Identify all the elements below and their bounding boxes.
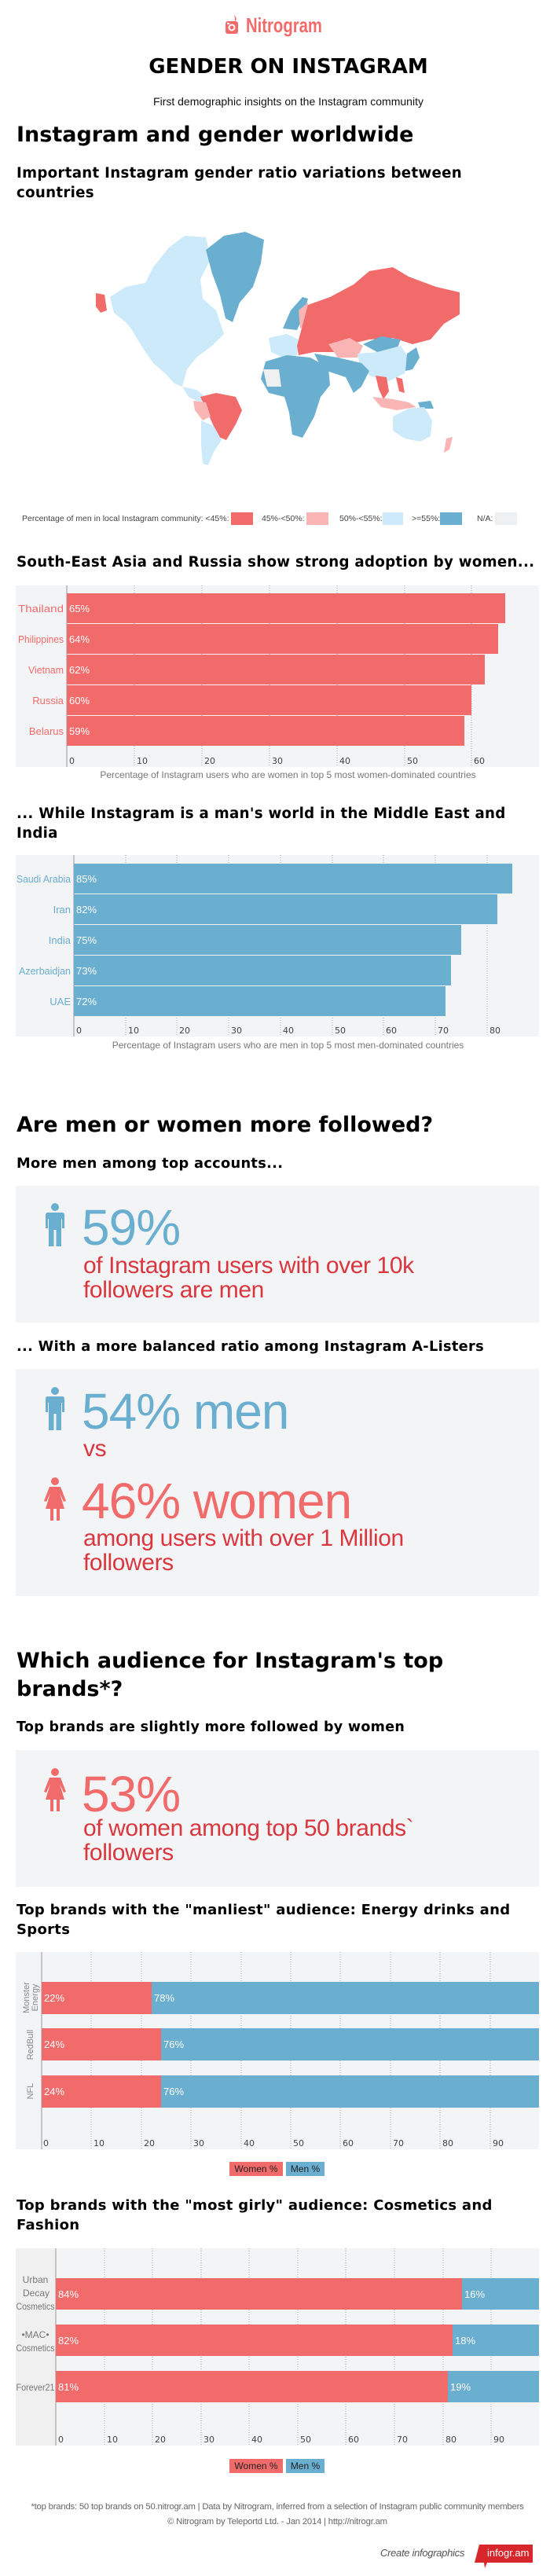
stacked bar chart: manliest brands: 20 bbox=[144, 2138, 155, 2149]
bar chart: women-dominated countries: Thailand bbox=[18, 603, 64, 615]
stacked bar chart: manliest brands: 40 bbox=[244, 2138, 255, 2149]
Africa bbox=[261, 355, 330, 438]
icon: woman bbox=[44, 1768, 66, 1811]
stacked bar chart: girly brands: 0 bbox=[58, 2435, 64, 2445]
text: description bbox=[83, 1525, 404, 1576]
Asia bbox=[314, 336, 434, 410]
legend: girly chart: Women % bbox=[234, 2460, 278, 2471]
stacked bar chart: manliest brands: NFL bbox=[26, 2083, 35, 2099]
map legend: N/A: bbox=[477, 514, 493, 523]
bar chart: men-dominated countries: India bbox=[49, 934, 72, 946]
stacked bar chart: girly brands: 81% bbox=[58, 2381, 79, 2393]
bar chart: men-dominated countries: 0 bbox=[76, 1026, 82, 1036]
stacked bar chart: girly brands: Decay bbox=[23, 2288, 50, 2299]
Europe and Russia bbox=[269, 267, 460, 358]
stat: 53%: 53% bbox=[82, 1766, 180, 1822]
stacked bar chart: manliest brands: 78% bbox=[154, 1992, 174, 2004]
bar chart: women-dominated countries: 40 bbox=[339, 756, 350, 766]
stacked bar chart: girly brands: 60 bbox=[348, 2435, 359, 2445]
caption: men chart: Percentage of Instagram users who are men in top 5 most men-dominated countries bbox=[112, 1040, 464, 1051]
legend: manliest chart: Men % bbox=[291, 2163, 320, 2174]
bar chart: men-dominated countries: 40 bbox=[283, 1026, 294, 1036]
text: description: of women among top 50 brands` bbox=[83, 1815, 413, 1841]
stacked bar chart: manliest brands: 90 bbox=[493, 2138, 504, 2149]
heading: Are men or women more followed?: Are men or women more followed? bbox=[16, 1113, 433, 1137]
text: description: followers bbox=[83, 1840, 174, 1866]
subheading: Top brands slightly more followed by women: Top brands are slightly more followed by women bbox=[16, 1719, 405, 1735]
subheading: most girly audience: Top brands with the "most girly" audience: Cosmetics and Fashion bbox=[16, 2197, 493, 2233]
stacked bar chart: manliest brands: 24% bbox=[44, 2086, 64, 2097]
map legend: Percentage of men in local Instagram community: <45%: bbox=[22, 514, 229, 523]
icon: man bbox=[46, 1387, 64, 1430]
bar chart: men-dominated countries: 80 bbox=[490, 1026, 500, 1036]
icon: camera logo bbox=[226, 15, 238, 34]
stacked bar chart: girly brands: Cosmetics bbox=[16, 2301, 55, 2312]
stacked bar chart: manliest brands: 30 bbox=[193, 2138, 204, 2149]
panel: 53% women bbox=[16, 1750, 539, 1887]
stat: 46% women: 46% women bbox=[82, 1473, 351, 1529]
bar chart: women-dominated countries bbox=[16, 585, 539, 767]
title: GENDER ON INSTAGRAM bbox=[148, 55, 428, 79]
subheading: balanced ratio among A-Listers: ... With a more balanced ratio among Instagram A-Listers bbox=[16, 1338, 484, 1355]
bar chart: women-dominated countries: 60% bbox=[69, 695, 90, 706]
badge: Create infographics infogr.am: Create infographics bbox=[380, 2547, 464, 2559]
bar chart: women-dominated countries: 62% bbox=[69, 664, 90, 676]
footer notes: © Nitrogram by Teleportd Ltd. - Jan 2014 | http://nitrogr.am bbox=[167, 2517, 387, 2526]
stacked bar chart: girly brands: •MAC• bbox=[21, 2329, 50, 2340]
text: vs: vs bbox=[83, 1436, 106, 1462]
bar chart: women-dominated countries: 60 bbox=[474, 756, 485, 766]
subheading: South-East Asia and Russia: South-East Asia and Russia show strong adoption by women... bbox=[16, 554, 534, 571]
stacked bar chart: girly brands: Urban bbox=[23, 2274, 48, 2285]
bar chart: women-dominated countries: Vietnam bbox=[28, 664, 64, 676]
bar chart: men-dominated countries: 10 bbox=[128, 1026, 139, 1036]
bar chart: women-dominated countries: Belarus bbox=[29, 725, 64, 737]
bar chart: men-dominated countries: Iran bbox=[53, 904, 71, 916]
stacked bar chart: manliest brands: Monster bbox=[22, 1982, 31, 2013]
bar chart: men-dominated countries: 30 bbox=[231, 1026, 242, 1036]
text: description bbox=[83, 1253, 415, 1303]
stacked bar chart: girly brands: 70 bbox=[397, 2435, 408, 2445]
bar chart: men-dominated countries: 72% bbox=[76, 996, 97, 1007]
bar chart: women-dominated countries: 64% bbox=[69, 633, 90, 645]
subheading: Middle East and India: ... While Instagram is a man's world in the Middle East and India bbox=[16, 805, 506, 842]
bar chart: women-dominated countries: 65% bbox=[69, 603, 90, 615]
stacked bar chart: girly brands: 90 bbox=[493, 2435, 504, 2445]
stacked bar chart: girly brands bbox=[16, 2248, 539, 2446]
logo: Nitrogram: Nitrogram bbox=[246, 13, 322, 37]
stacked bar chart: girly brands: Forever21 bbox=[16, 2382, 55, 2393]
stacked bar chart: manliest brands: 50 bbox=[293, 2138, 304, 2149]
stacked bar chart: manliest brands: 0 bbox=[43, 2138, 49, 2149]
bar chart: men-dominated countries: 20 bbox=[179, 1026, 190, 1036]
panel: 54% men vs 46% women bbox=[16, 1369, 539, 1596]
subheading: More men among top accounts: More men among top accounts... bbox=[16, 1155, 283, 1172]
stacked bar chart: girly brands: 80 bbox=[446, 2435, 456, 2445]
map legend: 50%-<55%: bbox=[339, 514, 383, 523]
footer notes: *top brands: 50 top brands on 50.nitrogr.am | Data by Nitrogram, inferred from a selection of Instagram public community members bbox=[31, 2502, 524, 2512]
stat: 59%: 59% bbox=[82, 1199, 180, 1256]
Greenland bbox=[206, 232, 264, 322]
stacked bar chart: girly brands: 16% bbox=[464, 2288, 485, 2300]
bar chart: men-dominated countries: UAE bbox=[50, 996, 71, 1007]
bar chart: women-dominated countries: Russia bbox=[32, 695, 64, 706]
text: description: of Instagram users with over 10k bbox=[83, 1253, 414, 1279]
stacked bar chart: manliest brands: 76% bbox=[163, 2086, 184, 2097]
subheading: manliest audience: Top brands with the "manliest" audience: Energy drinks and Sports bbox=[16, 1902, 510, 1938]
bar chart: women-dominated countries: Philippines bbox=[18, 633, 64, 645]
bar chart: women-dominated countries: 30 bbox=[272, 756, 283, 766]
stacked bar chart: manliest brands: 76% bbox=[163, 2038, 184, 2050]
caption: women chart: Percentage of Instagram users who are women in top 5 most women-dominated countries bbox=[100, 769, 476, 780]
stat: 54% men: 54% men bbox=[82, 1383, 288, 1440]
bar chart: men-dominated countries: 70 bbox=[438, 1026, 449, 1036]
stacked bar chart: manliest brands: 24% bbox=[44, 2038, 64, 2050]
bar chart: men-dominated countries: 50 bbox=[335, 1026, 346, 1036]
icon: woman bbox=[44, 1477, 66, 1521]
bar chart: men-dominated countries bbox=[16, 855, 539, 1037]
badge: Create infographics infogr.am bbox=[380, 2545, 533, 2568]
text: description: among users with over 1 Million bbox=[83, 1525, 404, 1551]
legend: manliest chart bbox=[229, 2162, 324, 2176]
stacked bar chart: manliest brands: RedBull bbox=[26, 2030, 35, 2060]
bar chart: women-dominated countries: 59% bbox=[69, 725, 90, 737]
bar chart: men-dominated countries: Saudi Arabia bbox=[16, 873, 72, 885]
stacked bar chart: girly brands: 82% bbox=[58, 2335, 79, 2347]
Australia & NZ bbox=[393, 407, 453, 453]
text: description: followers bbox=[83, 1550, 174, 1576]
map legend: 45%-<50%: bbox=[262, 514, 305, 523]
stacked bar chart: manliest brands: 70 bbox=[393, 2138, 404, 2149]
bar chart: men-dominated countries: 85% bbox=[76, 873, 97, 885]
subtitle: First demographic insights on the Instagram community bbox=[153, 95, 424, 108]
heading: Which audience for Instagram's top brands: Which audience for Instagram's top brands*? bbox=[16, 1649, 443, 1701]
stacked bar chart: girly brands: 20 bbox=[155, 2435, 166, 2445]
stacked bar chart: girly brands: 18% bbox=[455, 2335, 475, 2347]
bar chart: women-dominated countries: 0 bbox=[69, 756, 75, 766]
bar chart: men-dominated countries: 82% bbox=[76, 904, 97, 916]
legend: manliest chart: Women % bbox=[234, 2163, 278, 2174]
map legend: >=55%: bbox=[412, 514, 440, 523]
badge: Create infographics infogr.am: infogr.am bbox=[487, 2547, 529, 2559]
bar chart: women-dominated countries: 50 bbox=[407, 756, 418, 766]
bar chart: women-dominated countries: 20 bbox=[204, 756, 215, 766]
stacked bar chart: girly brands: 40 bbox=[251, 2435, 262, 2445]
text: description: followers are men bbox=[83, 1277, 264, 1303]
South America bbox=[193, 393, 242, 465]
stacked bar chart: manliest brands: 60 bbox=[343, 2138, 354, 2149]
bar chart: men-dominated countries: 73% bbox=[76, 965, 97, 977]
text: description bbox=[83, 1815, 413, 1866]
subheading: gender ratio variations: Important Instagram gender ratio variations between countries bbox=[16, 165, 462, 201]
stacked bar chart: girly brands: 30 bbox=[204, 2435, 214, 2445]
stacked bar chart: girly brands: 84% bbox=[58, 2288, 79, 2300]
stacked bar chart: manliest brands: 22% bbox=[44, 1992, 64, 2004]
stacked bar chart: manliest brands bbox=[16, 1952, 539, 2149]
world map bbox=[96, 232, 460, 465]
bar chart: women-dominated countries: 10 bbox=[137, 756, 148, 766]
stacked bar chart: girly brands: Cosmetics bbox=[16, 2343, 55, 2354]
bar chart: men-dominated countries: 75% bbox=[76, 934, 97, 946]
stacked bar chart: girly brands: 50 bbox=[300, 2435, 311, 2445]
panel: 59% men bbox=[16, 1186, 539, 1323]
stacked bar chart: manliest brands: Energy bbox=[31, 1983, 40, 2011]
bar chart: men-dominated countries: Azerbaidjan bbox=[19, 965, 71, 977]
map legend bbox=[22, 512, 517, 525]
stacked bar chart: manliest brands: 80 bbox=[442, 2138, 453, 2149]
stacked bar chart: girly brands: 10 bbox=[107, 2435, 118, 2445]
bar chart: men-dominated countries: 60 bbox=[386, 1026, 397, 1036]
legend: girly chart bbox=[229, 2459, 324, 2473]
stacked bar chart: manliest brands: 10 bbox=[94, 2138, 104, 2149]
North America bbox=[96, 236, 224, 402]
heading: Instagram and gender worldwide: Instagram and gender worldwide bbox=[16, 123, 413, 147]
icon: man bbox=[46, 1203, 64, 1246]
legend: girly chart: Men % bbox=[291, 2460, 320, 2471]
stacked bar chart: girly brands: 19% bbox=[450, 2381, 471, 2393]
footer notes bbox=[31, 2502, 524, 2526]
